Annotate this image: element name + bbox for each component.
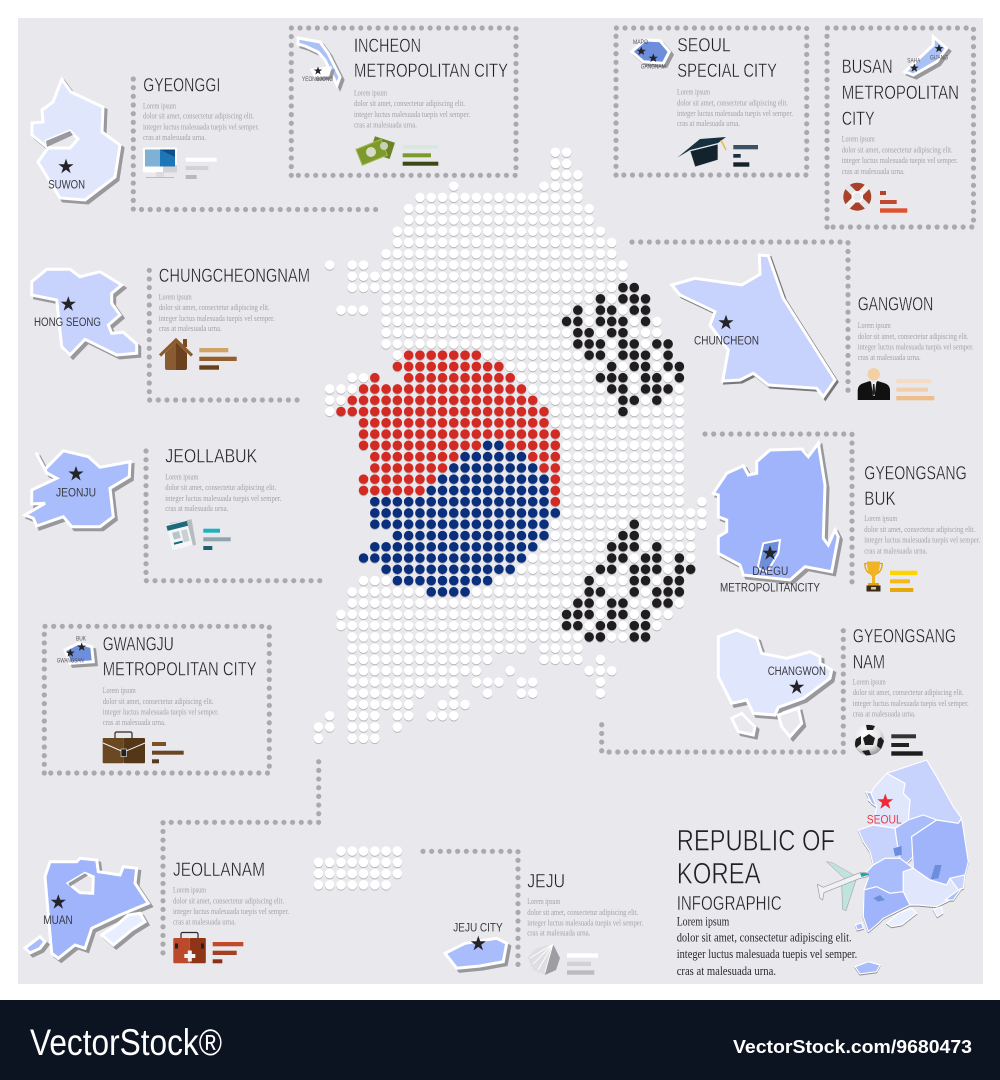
text block	[159, 291, 275, 333]
text block: cras at malesuada urna.	[103, 717, 166, 727]
text block	[165, 471, 281, 513]
heading: METROPOLITAN	[842, 82, 959, 104]
heading: METROPOLITAN CITY	[354, 60, 508, 82]
map: Gyeonggi	[32, 79, 120, 200]
text block	[853, 676, 969, 719]
icon: briefcase	[103, 732, 145, 763]
icon: computer	[143, 148, 177, 178]
dotted flag map of Korea	[318, 152, 703, 885]
bars	[890, 571, 917, 592]
bars	[203, 529, 231, 550]
overview map of Korea	[855, 760, 968, 974]
icon: businessman	[858, 368, 890, 400]
bars	[880, 191, 907, 213]
white map dots	[318, 152, 703, 885]
text block: Lorem ipsum	[858, 320, 891, 330]
map: Gyeongsangnam	[718, 630, 832, 737]
text block: cras at malesuada urna.	[853, 709, 916, 719]
bars	[733, 145, 758, 167]
title: INFOGRAPHIC	[677, 892, 782, 915]
map: Chungcheongnam: HONG SEONG	[34, 317, 101, 329]
map: Busan	[905, 37, 948, 75]
panel: Seoul	[616, 28, 807, 175]
title: KOREA	[677, 857, 761, 890]
map: Gangwon	[672, 255, 835, 397]
panel: Incheon	[291, 28, 516, 175]
map: Incheon	[298, 38, 340, 85]
text block: cras at malesuada urna.	[864, 545, 927, 555]
text block: Lorem ipsum	[842, 134, 875, 144]
map: Incheon: YEONGJONG	[302, 77, 333, 83]
text block: cras at malesuada urna.	[858, 352, 921, 362]
text block: Lorem ipsum	[173, 885, 206, 895]
text block: Lorem ipsum	[527, 896, 561, 906]
intro text: integer luctus malesuada tuepis vel semper.	[677, 946, 857, 961]
text block: cras at malesuada urna.	[165, 503, 228, 513]
text block: Lorem ipsum	[677, 87, 710, 97]
text block: integer luctus malesuada tuepis vel semper.	[159, 313, 275, 323]
panel: Jeollanam	[25, 762, 319, 963]
heading: BUSAN	[842, 56, 893, 78]
text block	[842, 134, 958, 176]
heading: CITY	[842, 108, 875, 130]
heading	[103, 634, 257, 681]
bars	[152, 742, 184, 763]
heading	[853, 626, 956, 674]
text block: integer luctus malesuada tuepis vel semper.	[677, 108, 793, 118]
text block: dolor sit amet, consectetur adipiscing elit.	[173, 896, 284, 906]
heading: GANGWON	[858, 294, 933, 316]
text block: Lorem ipsum	[103, 685, 136, 695]
black trigram dots	[567, 288, 692, 637]
intro text: dolor sit amet, consectetur adipiscing elit.	[677, 930, 852, 945]
text block: dolor sit amet, consectetur adipiscing elit.	[853, 687, 964, 697]
text block	[173, 885, 289, 926]
bars	[199, 348, 237, 370]
text block: Lorem ipsum	[864, 513, 898, 523]
title: REPUBLIC OF	[677, 825, 835, 858]
map: Jeju: JEJU CITY	[453, 923, 503, 935]
heading: SPECIAL CITY	[677, 60, 777, 82]
blue taegeuk dots	[364, 445, 556, 592]
heading: GYEONGSANG	[853, 626, 956, 648]
title	[677, 825, 835, 915]
map: Busan: GIJANG	[930, 55, 948, 61]
text block: integer luctus malesuada tuepis vel semper.	[143, 122, 259, 132]
text block	[677, 87, 793, 128]
map: Gyeongsangbuk: METROPOLITANCITY	[720, 583, 820, 595]
map: Seoul: MAPO	[633, 40, 648, 46]
icon: house	[160, 339, 192, 370]
map: Jeollabuk	[25, 451, 130, 527]
heading	[354, 35, 508, 82]
map: Seoul	[632, 40, 669, 70]
map: Seoul: GANGNAM	[641, 64, 666, 70]
text block: cras at malesuada urna.	[143, 132, 206, 142]
text block: integer luctus malesuada tuepis vel semper.	[527, 918, 643, 928]
map: Chungcheongnam	[32, 269, 137, 355]
panel: Gangwon	[632, 242, 974, 400]
text block: dolor sit amet, consectetur adipiscing elit.	[103, 696, 214, 706]
bars	[403, 145, 438, 166]
intro text: cras at malesuada urna.	[677, 963, 776, 978]
text block: dolor sit amet, consectetur adipiscing elit.	[527, 907, 638, 917]
map: Jeju	[445, 923, 507, 968]
image id: VectorStock.com/9680473	[733, 1036, 972, 1057]
text block: dolor sit amet, consectetur adipiscing elit.	[677, 97, 788, 107]
icon: graduation cap	[678, 137, 726, 167]
bars	[891, 734, 923, 756]
panel: Busan	[827, 28, 974, 227]
heading	[842, 56, 959, 130]
heading: GWANGJU	[103, 634, 174, 656]
text block: dolor sit amet, consectetur adipiscing elit.	[842, 144, 953, 154]
map: Gwangju	[57, 637, 93, 665]
heading: SEOUL	[677, 35, 731, 57]
icon: trophy	[865, 562, 882, 592]
heading: JEJU	[527, 871, 565, 893]
panel: Gwangju	[44, 626, 269, 773]
heading: NAM	[853, 652, 885, 674]
text block: dolor sit amet, consectetur adipiscing elit.	[143, 111, 254, 121]
map: Gyeongsangnam: CHANGWON	[768, 666, 826, 678]
icon: first aid kit	[173, 932, 206, 963]
bars	[186, 158, 217, 179]
icon: airplane	[817, 862, 869, 911]
map: Gyeongsangbuk: DAEGU	[752, 566, 788, 578]
map: Gangwon: CHUNCHEON	[694, 335, 759, 347]
text block: cras at malesuada urna.	[842, 166, 905, 176]
map: Jeollanam: MUAN	[43, 915, 73, 927]
icon: money	[356, 136, 395, 165]
panel: Gyeonggi	[32, 74, 384, 210]
text block: dolor sit amet, consectetur adipiscing elit.	[354, 98, 465, 108]
text block: cras at malesuada urna.	[527, 928, 590, 938]
text block: integer luctus malesuada tuepis vel semper.	[173, 906, 289, 916]
text block: Lorem ipsum	[143, 100, 176, 110]
intro text: Lorem ipsum	[677, 914, 729, 929]
text block	[103, 685, 219, 727]
intro text	[677, 914, 857, 978]
heading: JEOLLANAM	[173, 859, 265, 881]
heading: INCHEON	[354, 35, 421, 57]
text block: cras at malesuada urna.	[354, 120, 417, 130]
text block: Lorem ipsum	[159, 291, 192, 301]
panel: Gyeongsangnam	[602, 626, 969, 756]
heading: METROPOLITAN CITY	[103, 659, 257, 681]
brand wordmark: VectorStock®	[30, 1022, 222, 1063]
heading: BUK	[864, 488, 896, 510]
map: Gwangju: BUK	[76, 637, 86, 643]
text block: dolor sit amet, consectetur adipiscing elit.	[858, 331, 969, 341]
heading: JEOLLABUK	[165, 446, 257, 468]
heading: GYEONGGI	[143, 74, 220, 96]
panel: Jeollabuk	[25, 446, 328, 581]
text block: Lorem ipsum	[853, 676, 886, 686]
red taegeuk dots	[341, 355, 556, 502]
panel: Chungcheongnam	[32, 265, 310, 400]
text block	[864, 513, 980, 555]
text block	[143, 100, 259, 142]
bars	[896, 379, 934, 400]
overview map of Korea: SEOUL	[867, 812, 902, 826]
text block: dolor sit amet, consectetur adipiscing elit.	[165, 482, 276, 492]
map: Jeollabuk: JEONJU	[56, 488, 96, 500]
text block: integer luctus malesuada tuepis vel semper.	[853, 698, 969, 708]
map: Gyeonggi: SUWON	[48, 179, 85, 191]
map: Gyeongsangbuk	[713, 443, 838, 595]
map: Jeollanam	[25, 858, 148, 958]
text block: dolor sit amet, consectetur adipiscing elit.	[159, 302, 270, 312]
heading: CHUNGCHEONGNAM	[159, 265, 310, 287]
bars	[567, 953, 598, 975]
text block: Lorem ipsum	[354, 88, 387, 98]
text block: integer luctus malesuada tuepis vel semper.	[842, 155, 958, 165]
footer bar	[0, 1000, 1000, 1080]
text block: cras at malesuada urna.	[677, 118, 740, 128]
panel: Gyeongsangbuk	[705, 434, 980, 595]
icon: seashell	[528, 944, 560, 975]
title block	[677, 825, 857, 978]
icon: lifebuoy	[843, 183, 871, 211]
text block: cras at malesuada urna.	[159, 323, 222, 333]
text block: integer luctus malesuada tuepis vel semper.	[354, 109, 470, 119]
bars	[213, 942, 243, 963]
icon: soccer ball	[853, 725, 884, 756]
text block: cras at malesuada urna.	[173, 916, 236, 926]
map: Busan: SAHA	[907, 58, 920, 64]
map: Gwangju: GWANGSAN	[57, 659, 84, 665]
icon: newspaper	[166, 519, 196, 550]
text block	[858, 320, 974, 362]
heading	[677, 35, 777, 82]
text block	[354, 88, 470, 130]
text block	[527, 896, 643, 938]
heading	[864, 462, 967, 510]
text block: Lorem ipsum	[165, 471, 199, 481]
text block: integer luctus malesuada tuepis vel semper.	[103, 707, 219, 717]
panel: Jeju	[423, 851, 643, 975]
text block: integer luctus malesuada tuepis vel semper.	[165, 493, 281, 503]
